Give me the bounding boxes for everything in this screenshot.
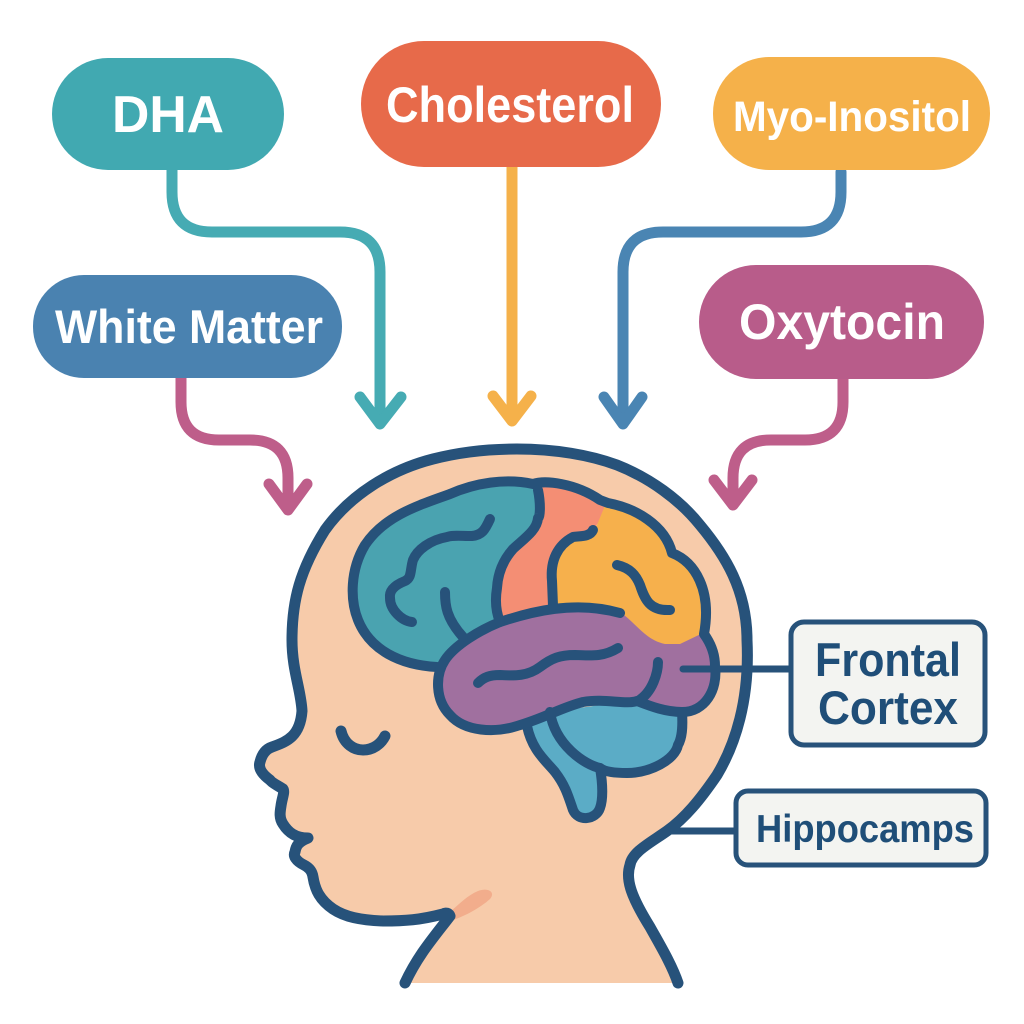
- label: Frontal Cortex: Frontal: [815, 633, 961, 686]
- pill: Oxytocin: [699, 265, 984, 379]
- lower blue lobe: [550, 700, 682, 773]
- pill: Cholesterol: Cholesterol: [386, 77, 634, 133]
- label: Frontal Cortex: [791, 622, 985, 745]
- label: Frontal Cortex: Cortex: [818, 681, 958, 734]
- pill: DHA: [52, 58, 284, 170]
- pill: Cholesterol: [361, 41, 661, 167]
- arrow: DHA to brain: [172, 170, 401, 424]
- pill: DHA: DHA: [112, 86, 224, 144]
- arrow: Cholesterol to brain: [493, 167, 531, 421]
- label: Hippocamps: Hippocamps: [756, 808, 974, 851]
- arrow: Oxytocin to brain: [714, 379, 843, 505]
- lobe boundaries and sulci: [390, 490, 670, 768]
- arrow: White Matter to brain: [181, 378, 307, 510]
- orange lobe: [496, 484, 610, 625]
- pill: Myo-Inositol: [713, 57, 990, 170]
- yellow lobe: [552, 503, 709, 648]
- brain stem lobe: [527, 712, 602, 818]
- purple lobe: [437, 607, 715, 730]
- closed eye: [341, 731, 385, 750]
- label: Hippocamps: [736, 791, 986, 865]
- teal lobe: [353, 481, 538, 667]
- head outline: [259, 449, 747, 983]
- connector to Frontal Cortex: [683, 666, 790, 672]
- pill: Oxytocin: Oxytocin: [739, 294, 945, 350]
- brain: [353, 481, 790, 818]
- neck shading patch: [450, 890, 492, 920]
- pill: White Matter: [33, 275, 342, 378]
- arrow: Myo-Inositol to brain: [604, 172, 841, 424]
- purple lobe outline: [438, 607, 682, 730]
- brain outline: [353, 481, 715, 818]
- pill: White Matter: White Matter: [55, 300, 323, 353]
- hippocamps connector line: [665, 828, 736, 834]
- head with face and neck: [259, 449, 747, 983]
- pill: Myo-Inositol: Myo-Inositol: [733, 93, 971, 141]
